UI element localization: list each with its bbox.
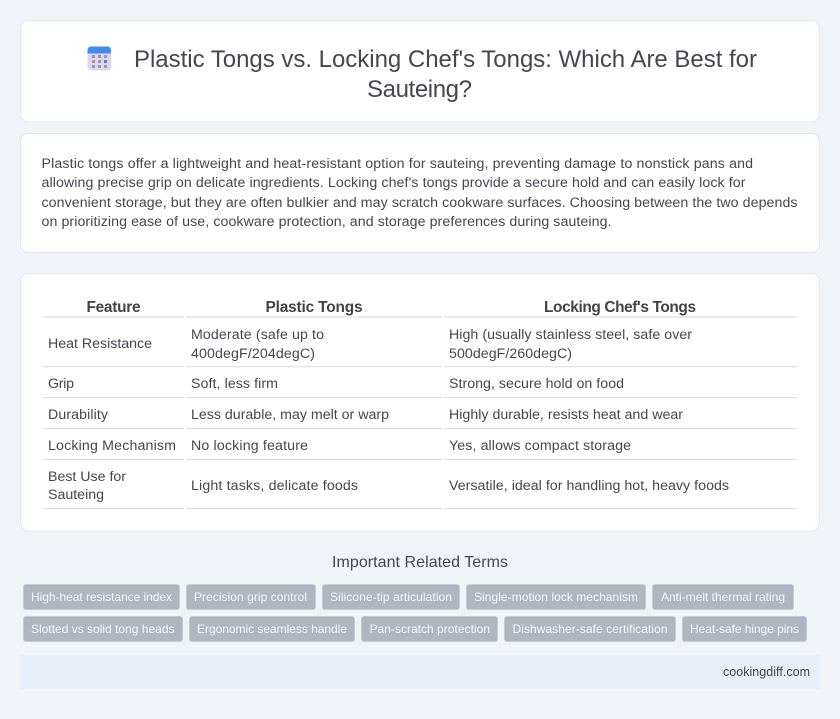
intro text: allowing precise grip on delicate ingredients. Locking chef's tongs provide a secure hold and can easily lock for (42, 175, 746, 191)
intro text: on prioritizing ease of use, cookware protection, and storage preferences during sauteing. (42, 214, 612, 230)
row: heat resistance: 400degF/204degC) (191, 346, 315, 362)
tag: Pan-scratch protection (370, 622, 490, 636)
tag (362, 616, 498, 642)
intro text: Plastic tongs offer a lightweight and heat-resistant option for sauteing, preventing damage to nonstick pans and (42, 156, 753, 172)
row: locking mechanism: No locking feature (191, 438, 308, 454)
row: durability: Less durable, may melt or warp (191, 407, 389, 423)
tag (190, 616, 354, 642)
row: heat resistance: High (usually stainless steel, safe over (449, 327, 692, 343)
footer: cookingdiff.com (723, 665, 810, 679)
row: heat resistance: 500degF/260degC) (449, 346, 572, 362)
panel: title header (20, 20, 820, 122)
tag: Ergonomic seamless handle (197, 622, 347, 636)
row: durability: Highly durable, resists heat and wear (449, 407, 683, 423)
row: best use for sauteing: Versatile, ideal for handling hot, heavy foods (449, 478, 729, 494)
tag (186, 584, 316, 610)
table rules (43, 317, 797, 508)
row: best use for sauteing: Light tasks, delicate foods (191, 478, 358, 494)
table header row: Feature (86, 299, 141, 316)
row: grip: Soft, less firm (191, 376, 278, 392)
row: best use for sauteing: Best Use for (48, 469, 126, 485)
row: grip: Strong, secure hold on food (449, 376, 624, 392)
title: Plastic Tongs vs. Locking Chef's Tongs: Which Are Best for (134, 46, 757, 73)
row: locking mechanism (48, 438, 631, 454)
tag: Precision grip control (194, 590, 307, 604)
heading: important related terms: Important Related Terms (332, 554, 508, 571)
title (134, 46, 757, 103)
tag (322, 584, 460, 610)
tag: Heat-safe hinge pins (690, 622, 799, 636)
row: durability (48, 407, 683, 423)
tag: Slotted vs solid tong heads (31, 622, 174, 636)
row: best use for sauteing (48, 469, 729, 503)
tag: Single-motion lock mechanism (474, 590, 638, 604)
intro text (42, 156, 798, 230)
tag (24, 616, 182, 642)
icon: calendar (88, 46, 111, 70)
row: heat resistance: Moderate (safe up to (191, 327, 324, 343)
tag (466, 584, 646, 610)
intro text: convenient storage, but they are often bulkier and may scratch cookware surfaces. Choosing between the two depends (42, 195, 798, 211)
tag (24, 584, 180, 610)
row: locking mechanism: Yes, allows compact storage (449, 438, 631, 454)
table header row: Locking Chef's Tongs (544, 299, 696, 316)
footer (20, 655, 820, 689)
panel: introduction (20, 134, 820, 252)
tag: Anti-melt thermal rating (661, 590, 785, 604)
tag (682, 616, 806, 642)
table header row: Plastic Tongs (266, 299, 362, 316)
panel: comparison table (20, 274, 820, 531)
title: Sauteing? (367, 76, 472, 103)
tag (504, 616, 676, 642)
row: best use for sauteing: Sauteing (48, 487, 104, 503)
row: locking mechanism: Locking Mechanism (48, 438, 176, 454)
row: durability: Durability (48, 407, 109, 423)
tag (652, 584, 794, 610)
tag: Silicone-tip articulation (330, 590, 452, 604)
row: heat resistance: Heat Resistance (48, 336, 152, 352)
row: grip (48, 376, 624, 392)
tag: Dishwasher-safe certification (512, 622, 668, 636)
row: heat resistance (48, 327, 692, 362)
tag group: related terms (24, 584, 806, 642)
table header row (86, 299, 696, 316)
tag: High-heat resistance index (31, 590, 172, 604)
row: grip: Grip (48, 376, 74, 392)
